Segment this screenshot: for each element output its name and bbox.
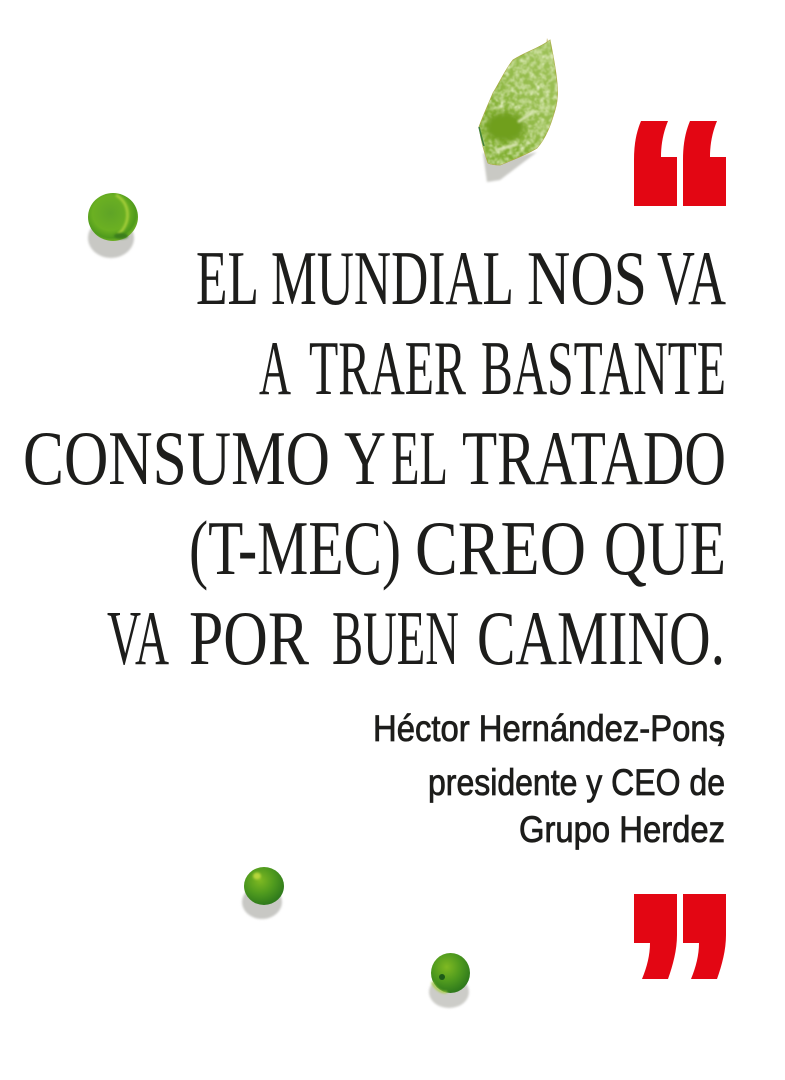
attribution bbox=[373, 708, 725, 850]
quote text: CREO bbox=[415, 505, 586, 591]
quote text: (T-MEC) bbox=[189, 505, 401, 591]
quote text: A bbox=[259, 325, 291, 411]
quote text: BUEN bbox=[332, 595, 459, 681]
icon: leaf bbox=[475, 36, 560, 182]
quote text: MUNDIAL bbox=[271, 235, 514, 321]
quote text: POR bbox=[189, 595, 310, 681]
quote text: Y bbox=[344, 415, 386, 501]
quote text: CONSUMO bbox=[23, 415, 330, 501]
quote text bbox=[23, 235, 726, 681]
icon: pea top left bbox=[88, 193, 138, 258]
icon: pea bottom right bbox=[429, 953, 470, 1008]
attribution: Grupo Herdez bbox=[519, 809, 725, 850]
quote text: QUE bbox=[604, 505, 726, 591]
icon: pea bottom left bbox=[242, 867, 284, 919]
icon: red closing quotation mark bbox=[634, 894, 726, 979]
attribution: presidente y CEO de bbox=[428, 762, 725, 803]
quote text: EL bbox=[391, 415, 448, 501]
quote text: VA bbox=[657, 235, 726, 321]
quote text: VA bbox=[107, 595, 169, 681]
attribution: Héctor Hernández-Pons bbox=[373, 708, 725, 749]
quote text: EL bbox=[196, 235, 259, 321]
quote text: NOS bbox=[527, 235, 647, 321]
icon: red opening quotation mark bbox=[634, 121, 726, 206]
quote text: TRAER bbox=[309, 325, 466, 411]
attribution: , bbox=[715, 708, 725, 749]
